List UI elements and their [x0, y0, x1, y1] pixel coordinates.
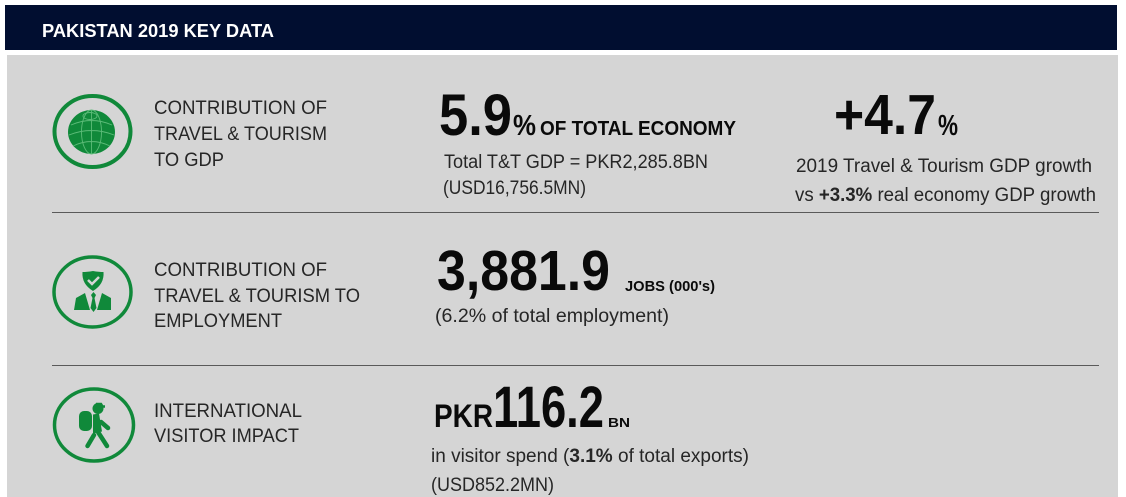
stat: PKR116.2BN: 116.2 [493, 375, 604, 440]
label: international visitor impact [154, 401, 302, 447]
text: total T&T GDP: Total T&T GDP = PKR2,285.8BN [444, 152, 708, 173]
text: share of employment: (6.2% of total employment) [435, 306, 669, 327]
label: contribution to employment: EMPLOYMENT [154, 311, 282, 332]
row: international visitor impact [54, 375, 749, 496]
stat: 3,881.9 jobs [437, 239, 715, 303]
label: contribution to GDP: TO GDP [154, 150, 224, 171]
stat: 3,881.9 jobs: 3,881.9 [437, 239, 610, 303]
text: total T&T GDP [443, 152, 708, 199]
label: contribution to employment: CONTRIBUTION OF [154, 260, 327, 281]
stat: 5.9% of total economy: 5.9 [439, 83, 512, 148]
header bar [5, 5, 1117, 50]
stat: 5.9% of total economy: % [513, 110, 536, 142]
label: contribution to GDP: TRAVEL & TOURISM [154, 124, 327, 145]
icon: hiker [54, 389, 134, 461]
stat: PKR116.2BN: PKR [434, 398, 493, 434]
stat: 3,881.9 jobs: JOBS (000's) [625, 278, 715, 295]
text: visitor spend: in visitor spend (3.1% of total exports) [431, 446, 749, 467]
label: contribution to employment [154, 260, 360, 332]
text: visitor spend [431, 446, 749, 496]
stat: +4.7%: % [938, 110, 958, 142]
text: total T&T GDP: (USD16,756.5MN) [443, 178, 586, 199]
label: contribution to GDP: CONTRIBUTION OF [154, 98, 327, 119]
icon: employee with check badge [54, 257, 131, 327]
text: visitor spend: (USD852.2MN) [431, 475, 554, 496]
stat: PKR116.2BN [434, 375, 630, 440]
label: international visitor impact: VISITOR IMPACT [154, 426, 299, 447]
text: growth comparison: 2019 Travel & Tourism GDP growth [796, 156, 1092, 177]
stat: 5.9% of total economy: OF TOTAL ECONOMY [540, 118, 737, 140]
stat: 5.9% of total economy [439, 83, 737, 148]
label: contribution to GDP [154, 98, 327, 171]
row: employment contribution [54, 239, 715, 332]
label: contribution to employment: TRAVEL & TOURISM TO [154, 286, 360, 307]
icon: globe [54, 96, 130, 167]
row: GDP contribution [54, 83, 1096, 206]
stat: +4.7%: +4.7 [834, 83, 936, 147]
label: international visitor impact: INTERNATIONAL [154, 401, 302, 422]
text: growth comparison: vs +3.3% real economy GDP growth [795, 185, 1096, 206]
text: growth comparison [795, 156, 1096, 206]
stat: PKR116.2BN: BN [608, 416, 630, 430]
header title: PAKISTAN 2019 KEY DATA [42, 21, 274, 41]
